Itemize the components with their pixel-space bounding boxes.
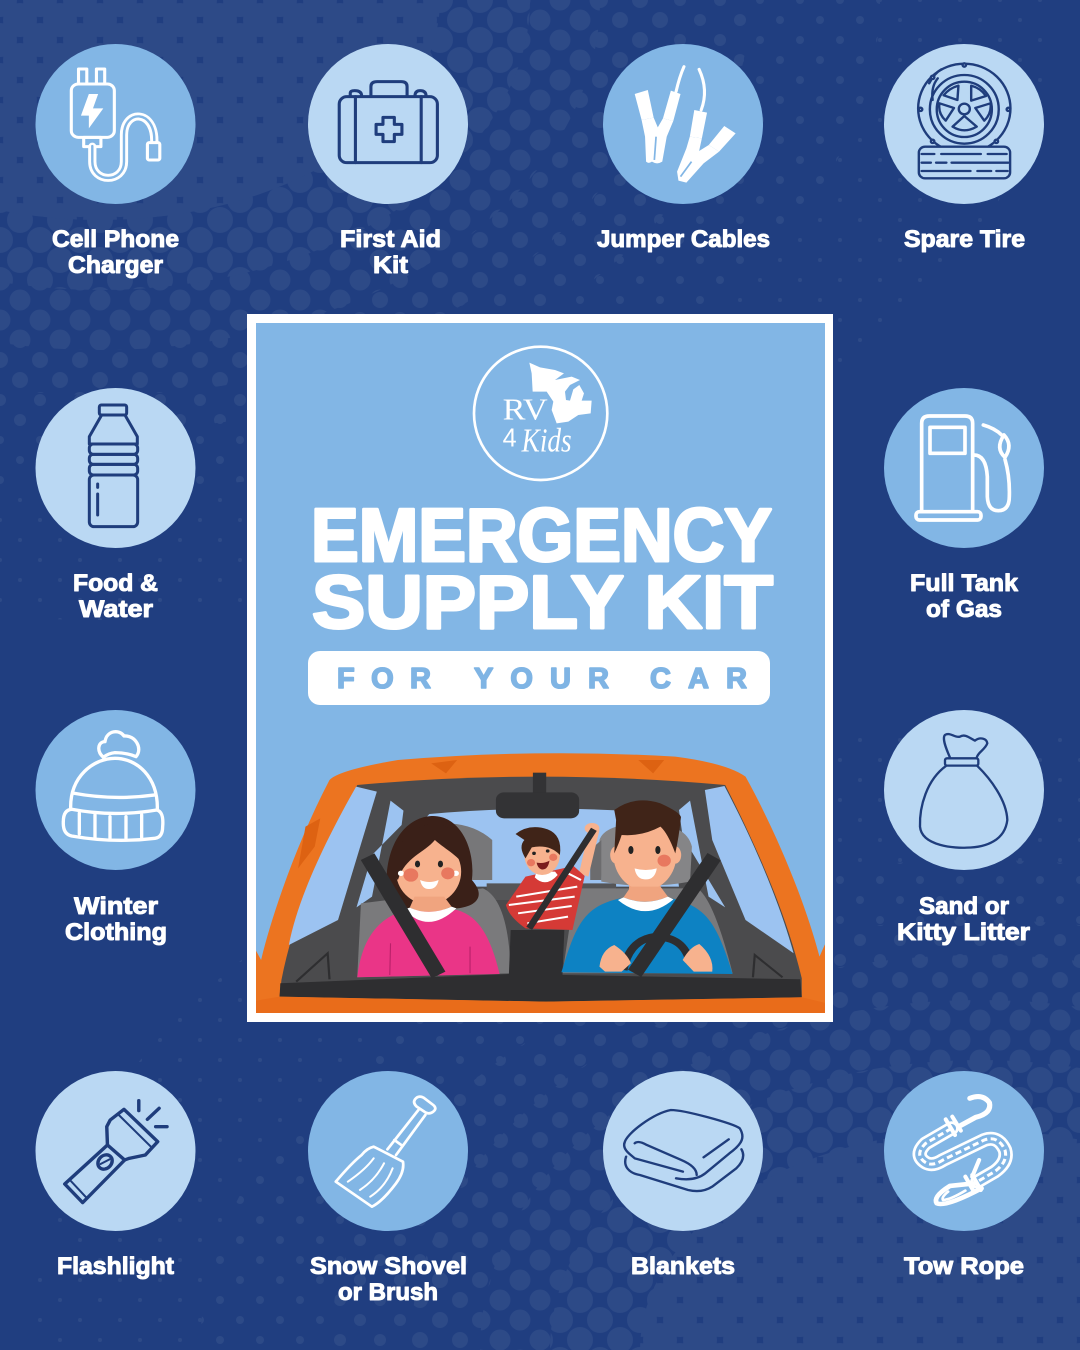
child (506, 823, 599, 930)
label: food and water (73, 570, 158, 623)
orange lower trim (262, 996, 822, 1002)
item: food and water (36, 388, 196, 623)
icon: water bottle (89, 405, 138, 527)
seats (357, 823, 733, 977)
logo: RV 4 Kids: Kids (521, 423, 572, 460)
item: jumper cables (597, 44, 770, 253)
icon: folded blankets (624, 1110, 743, 1191)
door trim (296, 953, 783, 982)
label: sand or kitty litter (897, 893, 1030, 946)
car body (250, 753, 827, 1013)
icon: charger (71, 69, 160, 178)
title: EMERGENCY (311, 493, 772, 577)
label: sand or kitty litter: Kitty Litter (897, 919, 1030, 946)
label: sand or kitty litter: Sand or (919, 893, 1009, 920)
item: first aid kit (308, 44, 468, 279)
label: snow shovel or brush: Snow Shovel (310, 1253, 467, 1280)
label: food and water: Water (79, 596, 153, 623)
label: food and water: Food & (73, 570, 158, 597)
subtitle pill (308, 651, 770, 705)
subtitle pill: FOR (337, 663, 431, 695)
item: cell phone charger (36, 44, 196, 279)
label: snow shovel or brush: or Brush (338, 1279, 438, 1306)
label: winter clothing: Clothing (65, 919, 167, 946)
icon: jumper cable clamps (635, 67, 736, 183)
central panel (247, 314, 833, 1022)
icon: winter hat (63, 732, 163, 840)
item: winter clothing (36, 710, 196, 946)
label: full tank of gas: of Gas (926, 596, 1002, 623)
title: SUPPLY KIT (312, 560, 773, 644)
icon: gas pump (916, 416, 1009, 520)
icon: first aid case (339, 82, 437, 163)
woman (357, 816, 500, 977)
mirror (496, 773, 579, 818)
item: spare tire (884, 44, 1044, 253)
label: winter clothing: Winter (74, 893, 158, 920)
item: tow rope (884, 1071, 1044, 1280)
icon: tires (918, 63, 1010, 178)
label: full tank of gas (910, 570, 1019, 623)
item: sand or kitty litter (884, 710, 1044, 946)
label: first aid kit: First Aid (340, 226, 441, 253)
windshield interior (280, 777, 802, 1002)
logo: RV 4 Kids: 4 (503, 423, 517, 453)
label: snow shovel or brush (310, 1253, 467, 1306)
dashboard (280, 974, 802, 1002)
item: blankets (603, 1071, 763, 1280)
title (311, 493, 773, 644)
label: blankets: Blankets (631, 1253, 735, 1280)
body shading (298, 760, 664, 868)
subtitle pill: CAR (650, 663, 747, 695)
label: cell phone charger (52, 226, 179, 279)
illustration: family in car (250, 753, 827, 1013)
logo: RV 4 Kids (474, 347, 607, 480)
label: full tank of gas: Full Tank (910, 570, 1019, 597)
item: snow shovel or brush (308, 1071, 468, 1306)
label: first aid kit (340, 226, 441, 279)
label: cell phone charger: Charger (68, 252, 163, 279)
man (561, 800, 733, 974)
side windows (289, 786, 794, 953)
label: jumper cables: Jumper Cables (597, 226, 770, 253)
icon: tow rope (920, 1097, 1006, 1204)
label: winter clothing (65, 893, 167, 946)
icon: flashlight (65, 1101, 167, 1203)
label: cell phone charger: Cell Phone (52, 226, 179, 253)
logo: RV 4 Kids: RV (503, 392, 548, 426)
label: spare tire: Spare Tire (904, 226, 1025, 253)
label: first aid kit: Kit (373, 252, 408, 279)
label: tow rope: Tow Rope (904, 1253, 1024, 1280)
item: full tank of gas (884, 388, 1044, 623)
label: flashlight: Flashlight (57, 1253, 174, 1280)
icon: sack (920, 734, 1007, 848)
icon: snow shovel (336, 1097, 435, 1207)
subtitle pill: YOUR (474, 663, 609, 695)
item: flashlight (36, 1071, 196, 1280)
